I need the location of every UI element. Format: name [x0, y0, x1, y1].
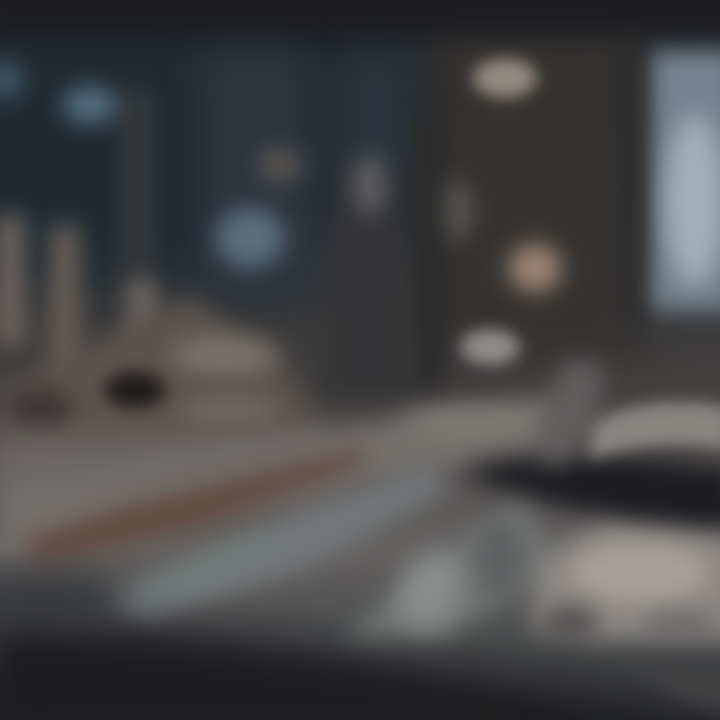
glowing lights [0, 58, 561, 365]
bright window at right [625, 30, 720, 330]
dark foreground edge [0, 575, 720, 720]
central tower [315, 110, 445, 400]
lower papers [110, 465, 720, 640]
left model buildings [0, 215, 330, 490]
red-brown diagonal band [20, 448, 370, 565]
table surface [0, 395, 560, 560]
right dark object [470, 360, 720, 530]
upper wall and windows [0, 0, 720, 360]
